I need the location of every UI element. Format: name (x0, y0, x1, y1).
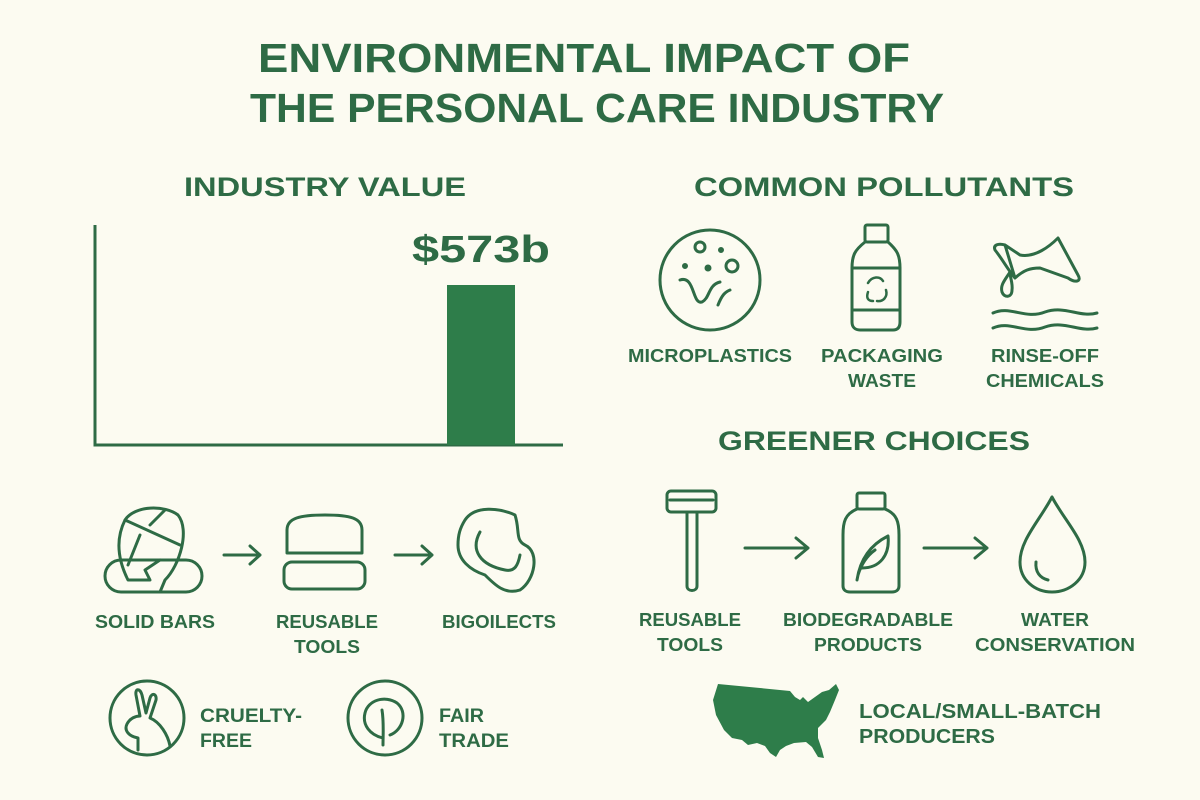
left choices labels: BIGOILECTS (442, 612, 556, 632)
greener labels: CONSERVATION (975, 635, 1135, 655)
icon: rinse-off chemicals (993, 238, 1097, 329)
arrow (924, 538, 987, 558)
pollutant labels (628, 346, 1104, 391)
left choices labels: SOLID BARS (95, 612, 215, 632)
arrow (745, 538, 808, 558)
icon: water drop (1020, 497, 1085, 592)
greener labels: PRODUCTS (814, 635, 922, 655)
arrow (395, 546, 432, 564)
icon: cruelty-free (110, 681, 184, 755)
title (250, 35, 944, 131)
left choices labels: TOOLS (294, 637, 360, 657)
left choices labels: FAIR (439, 706, 484, 727)
icon: biodegradable bottle (843, 493, 899, 592)
bar chart: $573b (412, 229, 550, 271)
heading: common pollutants: COMMON POLLUTANTS (694, 172, 1074, 202)
icon: razor (667, 491, 716, 590)
pollutant labels: MICROPLASTICS (628, 346, 792, 366)
greener labels: REUSABLE (639, 610, 741, 630)
icon: bigoilects blob (458, 509, 534, 591)
arrow (224, 546, 260, 564)
greener labels: TOOLS (657, 635, 723, 655)
left choices labels: REUSABLE (276, 612, 378, 632)
left choices labels (95, 612, 556, 752)
title: ENVIRONMENTAL IMPACT OF (258, 35, 910, 81)
icon: packaging waste bottle (852, 225, 900, 330)
pollutant labels: PACKAGING (821, 346, 943, 366)
icon: fair trade (348, 681, 422, 755)
label: local producers: LOCAL/SMALL-BATCH (859, 701, 1101, 723)
label: local producers: PRODUCERS (859, 726, 995, 748)
title: THE PERSONAL CARE INDUSTRY (250, 85, 944, 131)
pollutant labels: RINSE-OFF (991, 346, 1099, 366)
label: local producers (859, 701, 1101, 748)
left choices labels: CRUELTY- (200, 706, 302, 727)
greener labels: WATER (1021, 610, 1089, 630)
greener labels (639, 610, 1135, 655)
greener labels: BIODEGRADABLE (783, 610, 953, 630)
heading: greener choices: GREENER CHOICES (718, 426, 1030, 456)
icon: reusable tools (stack) (284, 515, 365, 589)
pollutant labels: WASTE (848, 371, 916, 391)
icon: solid bars (105, 508, 202, 592)
left choices labels: FREE (200, 731, 252, 752)
pollutant labels: CHEMICALS (986, 371, 1104, 391)
left choices labels: TRADE (439, 731, 509, 752)
icon: microplastics (660, 230, 760, 330)
heading: industry value: INDUSTRY VALUE (184, 172, 466, 202)
icon: US map (713, 684, 839, 758)
bar chart (95, 225, 563, 445)
